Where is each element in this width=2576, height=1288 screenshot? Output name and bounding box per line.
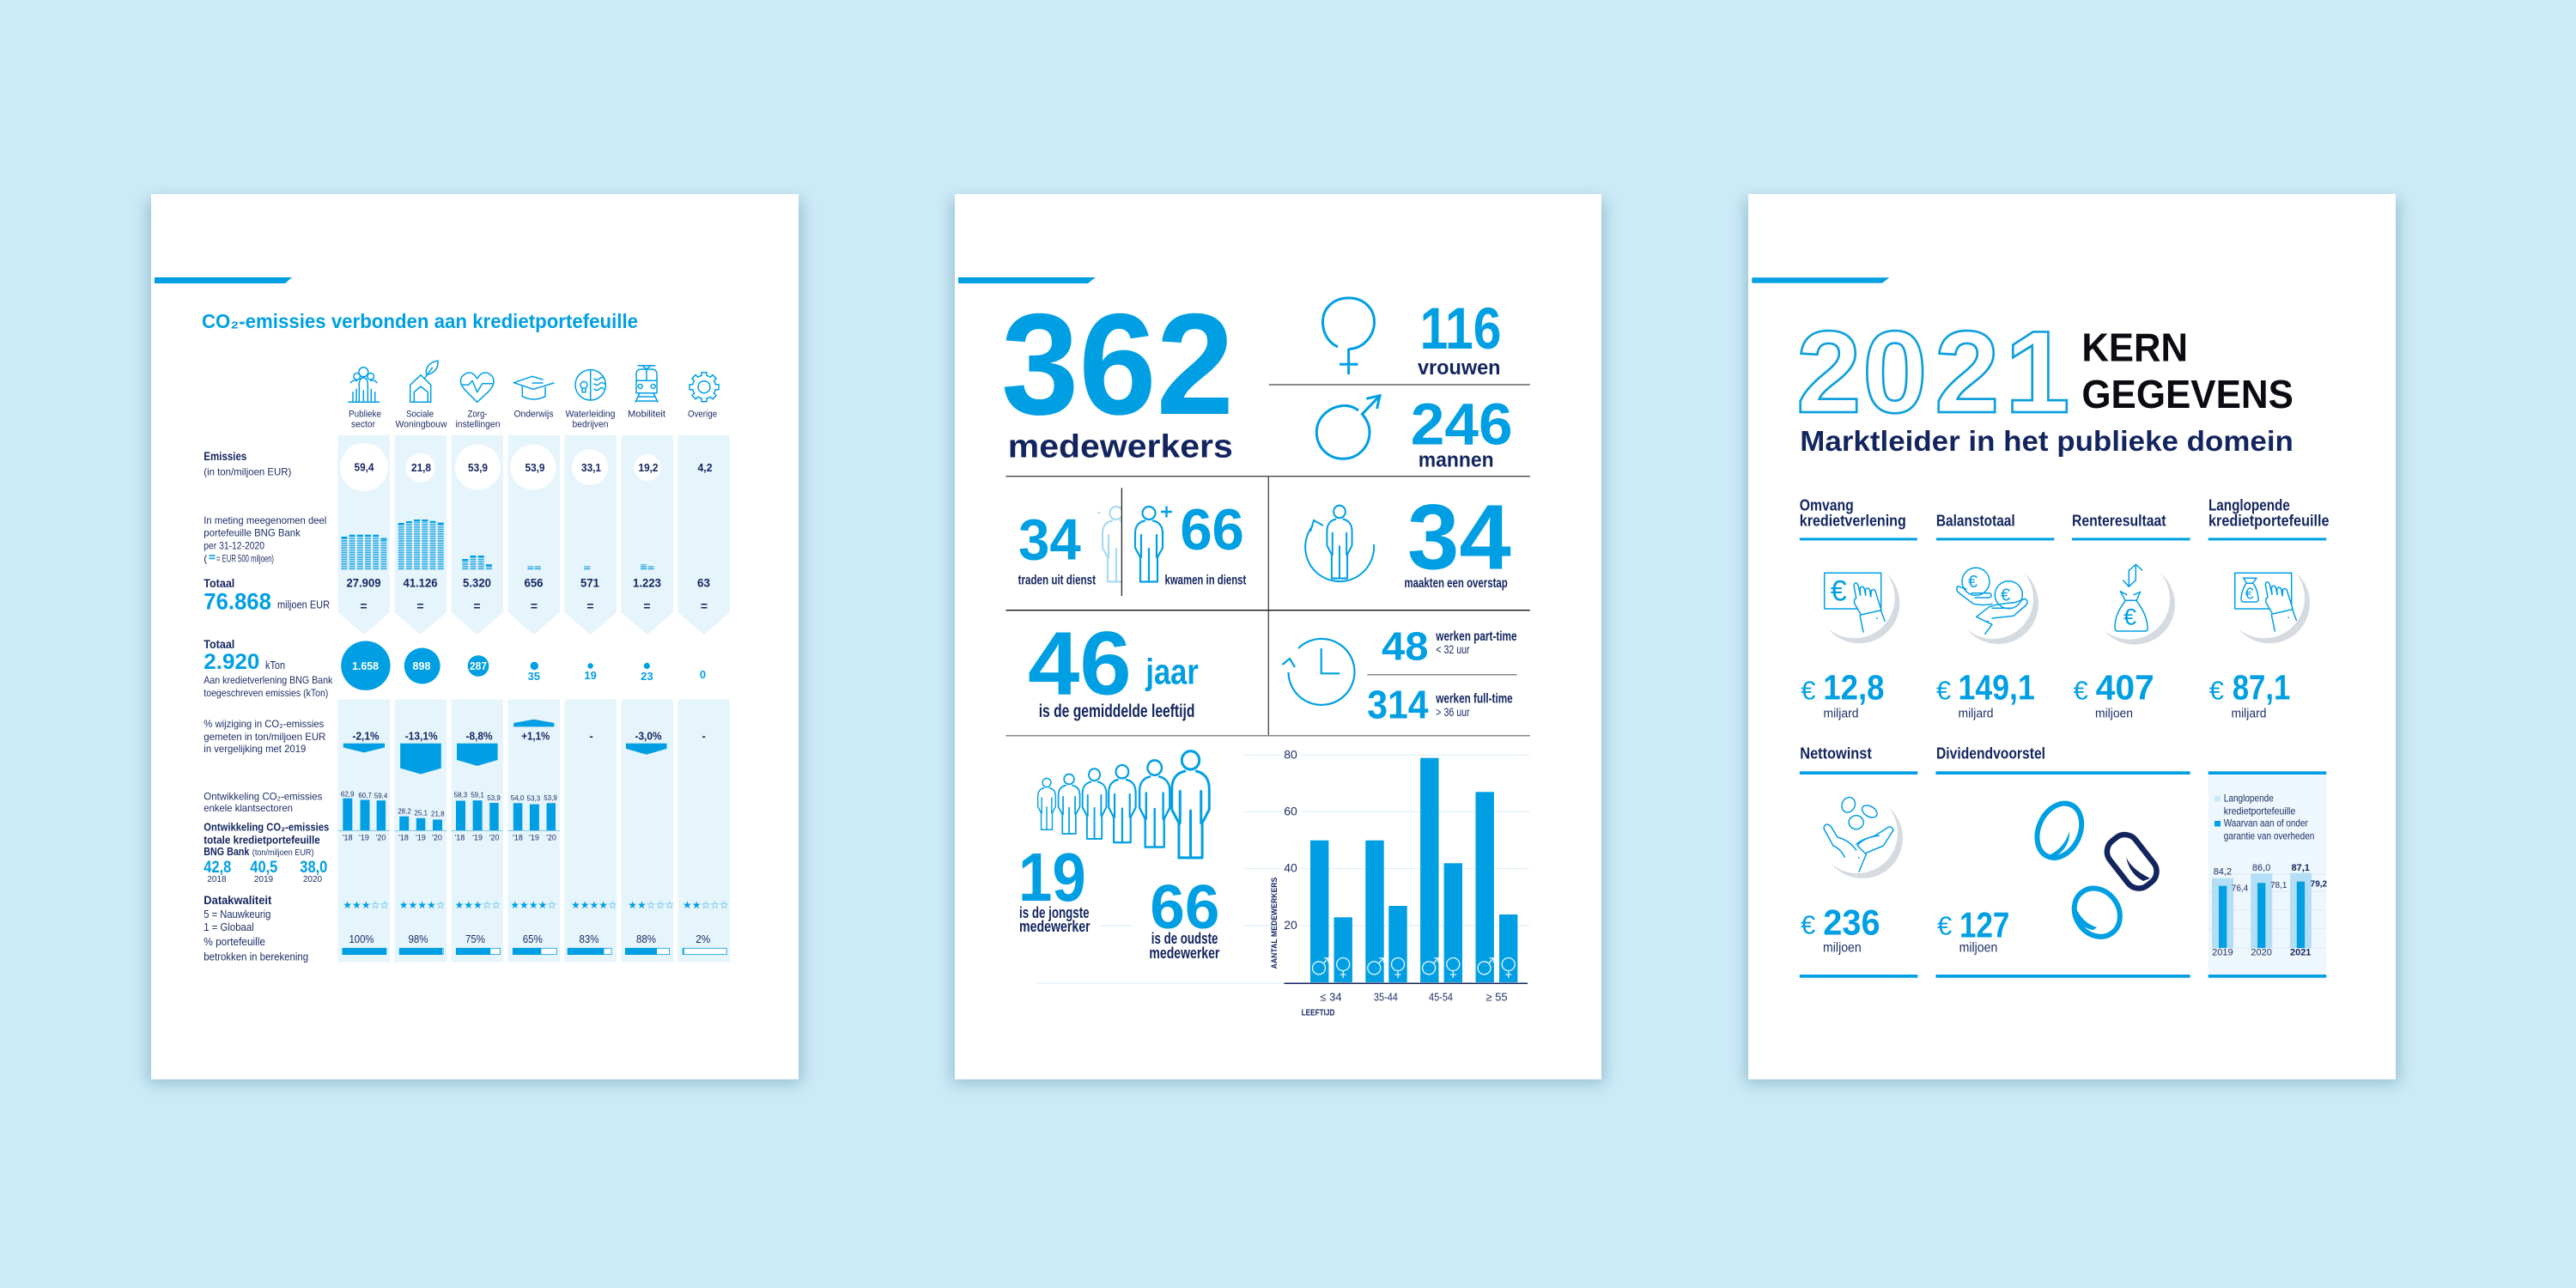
row label: percentage change: in vergelijking met 2019 <box>204 743 307 755</box>
total values: = <box>586 599 594 613</box>
sector bar charts <box>338 791 560 842</box>
row label: portfolio share: ( <box>204 553 207 565</box>
row label: development: 2018 <box>207 875 227 884</box>
row label: development: 42,8 <box>204 859 231 877</box>
stat: gemiddelde leeftijd <box>1028 613 1199 721</box>
bar chart: long-term portfolio: 2020 <box>2251 948 2272 958</box>
stat: kwamen in dienst <box>1164 497 1247 588</box>
stat: oudste: 66 <box>1150 873 1219 942</box>
divider lines <box>1005 385 1530 736</box>
stat: full-time <box>1367 683 1513 727</box>
quality stars: ★★★☆☆ <box>455 899 501 911</box>
bar chart: long-term portfolio: 79,2 <box>2311 880 2328 890</box>
icon: person leaving: - <box>1097 505 1101 519</box>
metric headers <box>1800 497 2329 529</box>
stat: gemiddelde leeftijd: jaar <box>1145 652 1199 692</box>
bar chart: employees by age: 20 <box>1284 918 1297 932</box>
total values: = <box>643 599 651 613</box>
total emission bubbles <box>341 641 706 690</box>
total emissions label: Totaal <box>204 637 234 651</box>
stat: gemiddelde leeftijd: is de gemiddelde leeftijd <box>1039 702 1194 721</box>
metric values: € <box>2209 675 2224 705</box>
icon: onderwijs <box>513 376 554 399</box>
icon: mars <box>1316 396 1380 459</box>
emission circles: 4,2 <box>697 462 713 474</box>
portfolio percentage labels: 75% <box>465 933 485 945</box>
stat: dividend: miljoen <box>1959 940 1997 955</box>
column backgrounds top <box>338 435 730 635</box>
row label: portfolio share: portefeuille BNG Bank <box>204 527 301 539</box>
bar chart: employees by age: 40 <box>1284 861 1297 875</box>
category labels: Zorg- <box>467 410 488 420</box>
total emission bubbles: 287 <box>470 659 487 672</box>
metric values: € <box>1936 675 1951 705</box>
bar chart: employees by age: ≤ 34 <box>1320 991 1342 1004</box>
stat: part-time: < 32 uur <box>1436 642 1470 656</box>
category labels: Waterleiding <box>565 410 615 420</box>
stat: nettowinst: miljoen <box>1823 940 1862 955</box>
sector bar charts: '19 <box>416 834 426 842</box>
bar chart: long-term portfolio: 76,4 <box>2232 884 2249 894</box>
metric values: 407 <box>2096 667 2154 707</box>
metric headers: Langlopende <box>2208 497 2290 514</box>
stat: part-time <box>1382 623 1517 668</box>
portfolio percentage labels: 83% <box>579 933 599 945</box>
row label: data quality: % portefeuille <box>204 936 265 948</box>
row label: emissies <box>204 450 291 477</box>
chart legend: Waarvan aan of onder <box>2224 817 2308 829</box>
row label: development: 2020 <box>303 875 323 884</box>
metric values: miljard <box>2231 707 2267 721</box>
total portfolio label: Totaal <box>204 576 234 590</box>
row label: emissies: (in ton/miljoen EUR) <box>204 465 291 477</box>
sector bar charts: 21,8 <box>431 810 445 817</box>
row label: emissies: Emissies <box>204 450 246 463</box>
portfolio percentage labels: 100% <box>349 933 374 945</box>
icon: large coin top <box>2029 796 2090 865</box>
icon: row of people growing <box>1038 751 1209 858</box>
bar chart: long-term portfolio: 87,1 <box>2291 863 2310 873</box>
sector bar charts: 54,0 <box>511 794 525 802</box>
heading: 2021 outline: 2021 <box>1796 307 2070 437</box>
bar chart: long-term portfolio: 78,1 <box>2270 881 2287 890</box>
total emissions label: kTon <box>265 659 285 671</box>
metric headers: kredietportefeuille <box>2208 512 2329 529</box>
total emissions label: Aan kredietverlening BNG Bank <box>204 674 333 686</box>
stat: nettowinst <box>1801 902 1880 955</box>
row label: data quality: 1 = Globaal <box>204 921 254 933</box>
sector bar charts: '20 <box>546 834 556 842</box>
stat: gemiddelde leeftijd: 46 <box>1028 613 1132 714</box>
icon: hands with coins: € <box>1968 573 1978 592</box>
icon: sociale woningbouw <box>410 361 438 402</box>
metric values: miljard <box>1824 707 1858 721</box>
portfolio percentage labels: 98% <box>409 933 428 945</box>
emission circles: 33,1 <box>581 462 601 474</box>
row label: portfolio share: = EUR 500 miljoen) <box>216 553 274 565</box>
total values: 27.909 <box>347 575 381 589</box>
total values: = <box>360 599 368 613</box>
bar chart: employees by age <box>1270 747 1528 1018</box>
row label: development: 40,5 <box>250 859 278 877</box>
stat: nettowinst: € <box>1801 910 1815 939</box>
category labels: Sociale <box>406 410 434 420</box>
portfolio percentage labels: 88% <box>636 933 656 945</box>
sector bar charts: '20 <box>432 834 442 842</box>
row label: data quality: Datakwaliteit <box>204 893 272 907</box>
stat: oudste: medewerker <box>1149 945 1219 962</box>
category labels: sector <box>351 420 375 430</box>
icon: navy coin <box>2101 829 2162 894</box>
metric values <box>1801 667 2290 721</box>
total emissions label: toegeschreven emissies (kTon) <box>204 687 328 699</box>
icon: portfolio screen with bag <box>2235 573 2296 631</box>
sector bar charts: 53,9 <box>487 794 501 802</box>
bar chart: employees by age: 80 <box>1284 747 1297 761</box>
icon: person leaving <box>1097 502 1133 588</box>
row label: percentage change: gemeten in ton/miljoen EUR <box>204 731 326 743</box>
chart grid lines <box>1036 755 1529 983</box>
total values: 63 <box>697 575 710 589</box>
stat: dividend: 127 <box>1959 905 2009 945</box>
total emission bubbles: 23 <box>641 670 653 683</box>
row label: portfolio share <box>204 514 326 565</box>
stat: oudste: is de oudste <box>1151 930 1218 947</box>
change arrows <box>343 720 666 775</box>
total values: 41.126 <box>404 575 438 589</box>
total values: 5.320 <box>463 575 491 589</box>
total values: 656 <box>524 575 544 589</box>
category labels: Mobiliteit <box>628 410 665 420</box>
total values: = <box>531 599 538 613</box>
bar chart: employees by age: ≥ 55 <box>1485 991 1508 1004</box>
total values: = <box>416 599 424 613</box>
total portfolio label <box>204 576 330 614</box>
label medewerkers: medewerkers <box>1008 429 1233 465</box>
chart legend <box>2215 792 2314 842</box>
icon: credit screen with euro: € <box>1831 574 1847 607</box>
sector bar charts: '18 <box>455 834 465 842</box>
icon: venus <box>1322 298 1374 374</box>
stat: mannen: mannen <box>1419 448 1494 471</box>
stat: traden uit dienst <box>1018 507 1096 588</box>
stat: full-time: > 36 uur <box>1436 705 1470 719</box>
bar chart: employees by age: 60 <box>1284 804 1297 817</box>
icon: zorg <box>460 373 494 402</box>
sector bar charts: '18 <box>398 834 409 842</box>
icon: person joining <box>1135 507 1172 582</box>
sector bar charts: 53,3 <box>527 795 541 802</box>
column backgrounds bottom <box>338 699 730 962</box>
header rules <box>1800 538 2326 540</box>
portfolio percentage labels <box>349 933 711 945</box>
total emission bubbles: 0 <box>700 668 706 681</box>
bar chart: long-term portfolio <box>2208 863 2328 958</box>
lower headers: Nettowinst <box>1800 744 1872 762</box>
percentage change values: +1,1% <box>521 730 550 743</box>
sector bar charts: 28,2 <box>398 808 411 816</box>
quality stars: ★★☆☆☆ <box>628 899 674 911</box>
row label: portfolio share: per 31-12-2020 <box>204 539 264 551</box>
emission circles: 53,9 <box>468 462 488 474</box>
accent bar <box>155 277 292 283</box>
metric values: miljard <box>1958 707 1994 721</box>
portfolio percentage labels: 2% <box>696 933 711 945</box>
quality stars: ★★★★☆ <box>571 899 617 911</box>
sector bar charts: 62,9 <box>341 791 355 799</box>
vertical separator <box>1121 488 1122 596</box>
icon: portfolio screen with bag: € <box>2245 585 2254 602</box>
icon discs <box>1814 557 2310 645</box>
stat: full-time: werken full-time <box>1436 692 1513 707</box>
stat: vrouwen: 116 <box>1420 295 1501 361</box>
emission circles: 19,2 <box>639 462 659 474</box>
lower headers <box>1800 744 2045 762</box>
metric values: 87,1 <box>2233 667 2290 707</box>
icon: hands with coins falling <box>1817 793 1903 878</box>
total emission bubbles: 1.658 <box>352 659 379 672</box>
sector bar charts: '19 <box>529 834 539 842</box>
panel: key figures card <box>1745 194 2399 1084</box>
percentage change values: -3,0% <box>635 730 662 743</box>
chart panel background <box>2208 775 2326 975</box>
metric headers: Omvang <box>1800 497 1854 514</box>
row label: data quality <box>204 893 308 963</box>
icon: hands with coins <box>1957 568 2027 634</box>
subtitle: Marktleider in het publieke domein <box>1800 425 2293 457</box>
panel: employees card <box>951 194 1605 1084</box>
total values: 571 <box>580 575 599 589</box>
bar chart: employees by age: 45-54 <box>1429 991 1453 1004</box>
icon: hands with coins: € <box>2001 586 2010 605</box>
metric headers: kredietverlening <box>1800 512 1906 529</box>
icon: large coin bottom <box>2065 879 2129 945</box>
portfolio percentage labels: 65% <box>523 933 543 945</box>
total portfolio label: miljoen EUR <box>277 599 330 611</box>
category labels: Publieke <box>349 410 381 420</box>
quality stars <box>343 899 729 911</box>
category labels: Overige <box>688 410 717 420</box>
chart legend: garantie van overheden <box>2224 830 2314 842</box>
stat: vrouwen: vrouwen <box>1418 356 1501 380</box>
stat: traden uit dienst: traden uit dienst <box>1018 574 1096 588</box>
total values: = <box>473 599 481 613</box>
emission circles: 21,8 <box>411 462 431 474</box>
sector bar charts: 60,7 <box>358 792 372 799</box>
sector bar charts: '20 <box>489 834 499 842</box>
bar chart: long-term portfolio: 86,0 <box>2252 863 2270 873</box>
category labels: Woningbouw <box>395 420 447 430</box>
percentage change values: - <box>702 730 706 743</box>
stat: traden uit dienst: 34 <box>1018 507 1081 573</box>
stat: kwamen in dienst: kwamen in dienst <box>1164 574 1247 588</box>
stat: vrouwen <box>1418 295 1501 380</box>
row label: percentage change <box>204 718 326 755</box>
row label: development: 2019 <box>254 875 274 884</box>
bar chart: employees by age: LEEFTIJD <box>1302 1009 1334 1018</box>
panel: CO2 emissions card <box>148 194 802 1084</box>
total values <box>347 575 710 613</box>
icon: credit screen with euro <box>1825 573 1885 632</box>
metric values: € <box>1801 675 1816 705</box>
emission circles: 53,9 <box>526 462 545 474</box>
row label: development: (ton/miljoen EUR) <box>252 848 314 858</box>
row label: development: enkele klantsectoren <box>204 802 293 814</box>
bar chart: employees by age: AANTAL MEDEWERKERS <box>1270 878 1279 969</box>
portfolio percentage bars <box>343 948 726 955</box>
percentage change values: -2,1% <box>352 730 380 743</box>
sector bar charts: '20 <box>376 834 386 842</box>
sector bar charts: '18 <box>343 834 353 842</box>
total values: 1.223 <box>633 575 661 589</box>
total values: = <box>701 599 708 613</box>
chart legend: Langlopende <box>2224 792 2274 804</box>
row label: percentage change: % wijziging in CO₂-emissies <box>204 718 324 730</box>
row label: data quality: betrokken in berekening <box>204 951 308 963</box>
percentage change values <box>352 730 706 743</box>
total emission bubbles: 35 <box>528 670 540 683</box>
lower headers: Dividendvoorstel <box>1936 744 2045 762</box>
emission circles <box>340 443 713 491</box>
row label: data quality: 5 = Nauwkeurig <box>204 908 270 920</box>
icon: overige <box>690 373 719 402</box>
percentage change values: - <box>589 730 593 743</box>
icon: money bag with arrows: € <box>2123 604 2136 629</box>
category labels <box>349 410 717 430</box>
row label: portfolio share: In meting meegenomen deel <box>204 514 326 526</box>
row label: development: 38,0 <box>300 859 327 877</box>
heading: kerngegevens <box>2081 325 2293 416</box>
stat: jongste: is de jongste <box>1019 904 1090 921</box>
row label: development: Ontwikkeling CO₂-emissies <box>204 790 322 802</box>
total portfolio label: 76.868 <box>204 588 271 614</box>
stat: part-time: 48 <box>1382 623 1429 668</box>
bar chart: employees by age: 35-44 <box>1374 991 1398 1004</box>
percentage change values: -8,8% <box>465 730 493 743</box>
sector bar charts: '18 <box>513 834 523 842</box>
metric values: 149,1 <box>1958 667 2035 707</box>
total emission bubbles: 898 <box>412 659 431 672</box>
icon: person with arc <box>1305 506 1374 581</box>
stat: nettowinst: 236 <box>1823 902 1880 942</box>
bar chart: long-term portfolio: 2021 <box>2290 948 2311 958</box>
heading: kerngegevens: KERN <box>2081 325 2188 370</box>
category labels: instellingen <box>455 420 500 430</box>
total emissions label: 2.920 <box>204 650 259 674</box>
category labels: Onderwijs <box>513 410 554 420</box>
quality stars: ★★★★☆ <box>399 899 445 911</box>
metric values: 12,8 <box>1823 667 1884 707</box>
stat: kwamen in dienst: 66 <box>1180 497 1244 562</box>
row label: development <box>204 790 329 884</box>
heading: kerngegevens: GEGEVENS <box>2081 372 2293 416</box>
sector bar charts: 59,4 <box>374 793 388 800</box>
icon: money bag with arrows <box>2115 564 2148 631</box>
stat: mannen: 246 <box>1411 392 1513 458</box>
chart legend: kredietportefeuille <box>2224 805 2296 817</box>
bar chart: long-term portfolio: 84,2 <box>2214 866 2232 877</box>
icon: mobiliteit <box>635 366 658 402</box>
emission circles: 59,4 <box>354 461 374 473</box>
lower rules <box>1800 771 2326 978</box>
stat: full-time: 314 <box>1367 683 1429 727</box>
metric headers: Balanstotaal <box>1936 512 2015 529</box>
quality stars: ★★★☆☆ <box>343 899 389 911</box>
metric headers: Renteresultaat <box>2072 512 2166 529</box>
accent bar <box>958 277 1096 283</box>
icon: clock <box>1283 639 1354 705</box>
category labels: bedrijven <box>572 420 608 430</box>
metric values: € <box>2073 675 2088 705</box>
row label: development: BNG Bank <box>204 846 249 858</box>
sector bar charts: 25,1 <box>414 810 428 817</box>
quality stars: ★★★★☆ <box>510 899 556 911</box>
stat: part-time: werken part-time <box>1436 629 1517 644</box>
total emission bubbles: 19 <box>584 669 597 682</box>
sector bar charts: 53,9 <box>544 794 557 802</box>
bar chart: long-term portfolio: 2019 <box>2212 948 2233 958</box>
sector bar charts: 59,1 <box>471 792 484 799</box>
sector bar charts: '19 <box>359 834 369 842</box>
stat: overstap: maakten een overstap <box>1405 576 1508 591</box>
headline 362: 362 <box>1001 283 1234 445</box>
total emissions label <box>204 637 333 699</box>
stat: overstap: 34 <box>1407 485 1511 589</box>
quality stars: ★★☆☆☆ <box>683 899 729 911</box>
title: CO₂-emissies verbonden aan kredietportefeuille <box>202 310 638 332</box>
stat: jongste: medewerker <box>1019 918 1091 935</box>
sector bar charts: '19 <box>472 834 483 842</box>
horizontal separators <box>1005 610 1530 611</box>
stacked block charts <box>341 519 654 570</box>
icon: waterleiding <box>575 370 605 400</box>
percentage change values: -13,1% <box>405 730 438 743</box>
sector bar charts: 58,3 <box>454 792 468 799</box>
row label: development: Ontwikkeling CO₂-emissies <box>204 822 329 834</box>
stat: jongste: 19 <box>1018 839 1086 915</box>
accent bar <box>1752 277 1889 283</box>
metric values: miljoen <box>2095 707 2133 721</box>
icon: publieke sector <box>349 368 380 402</box>
stat: dividend: € <box>1937 910 1952 940</box>
row label: development: totale kredietportefeuille <box>204 834 320 846</box>
stat: dividend <box>1937 905 2009 955</box>
